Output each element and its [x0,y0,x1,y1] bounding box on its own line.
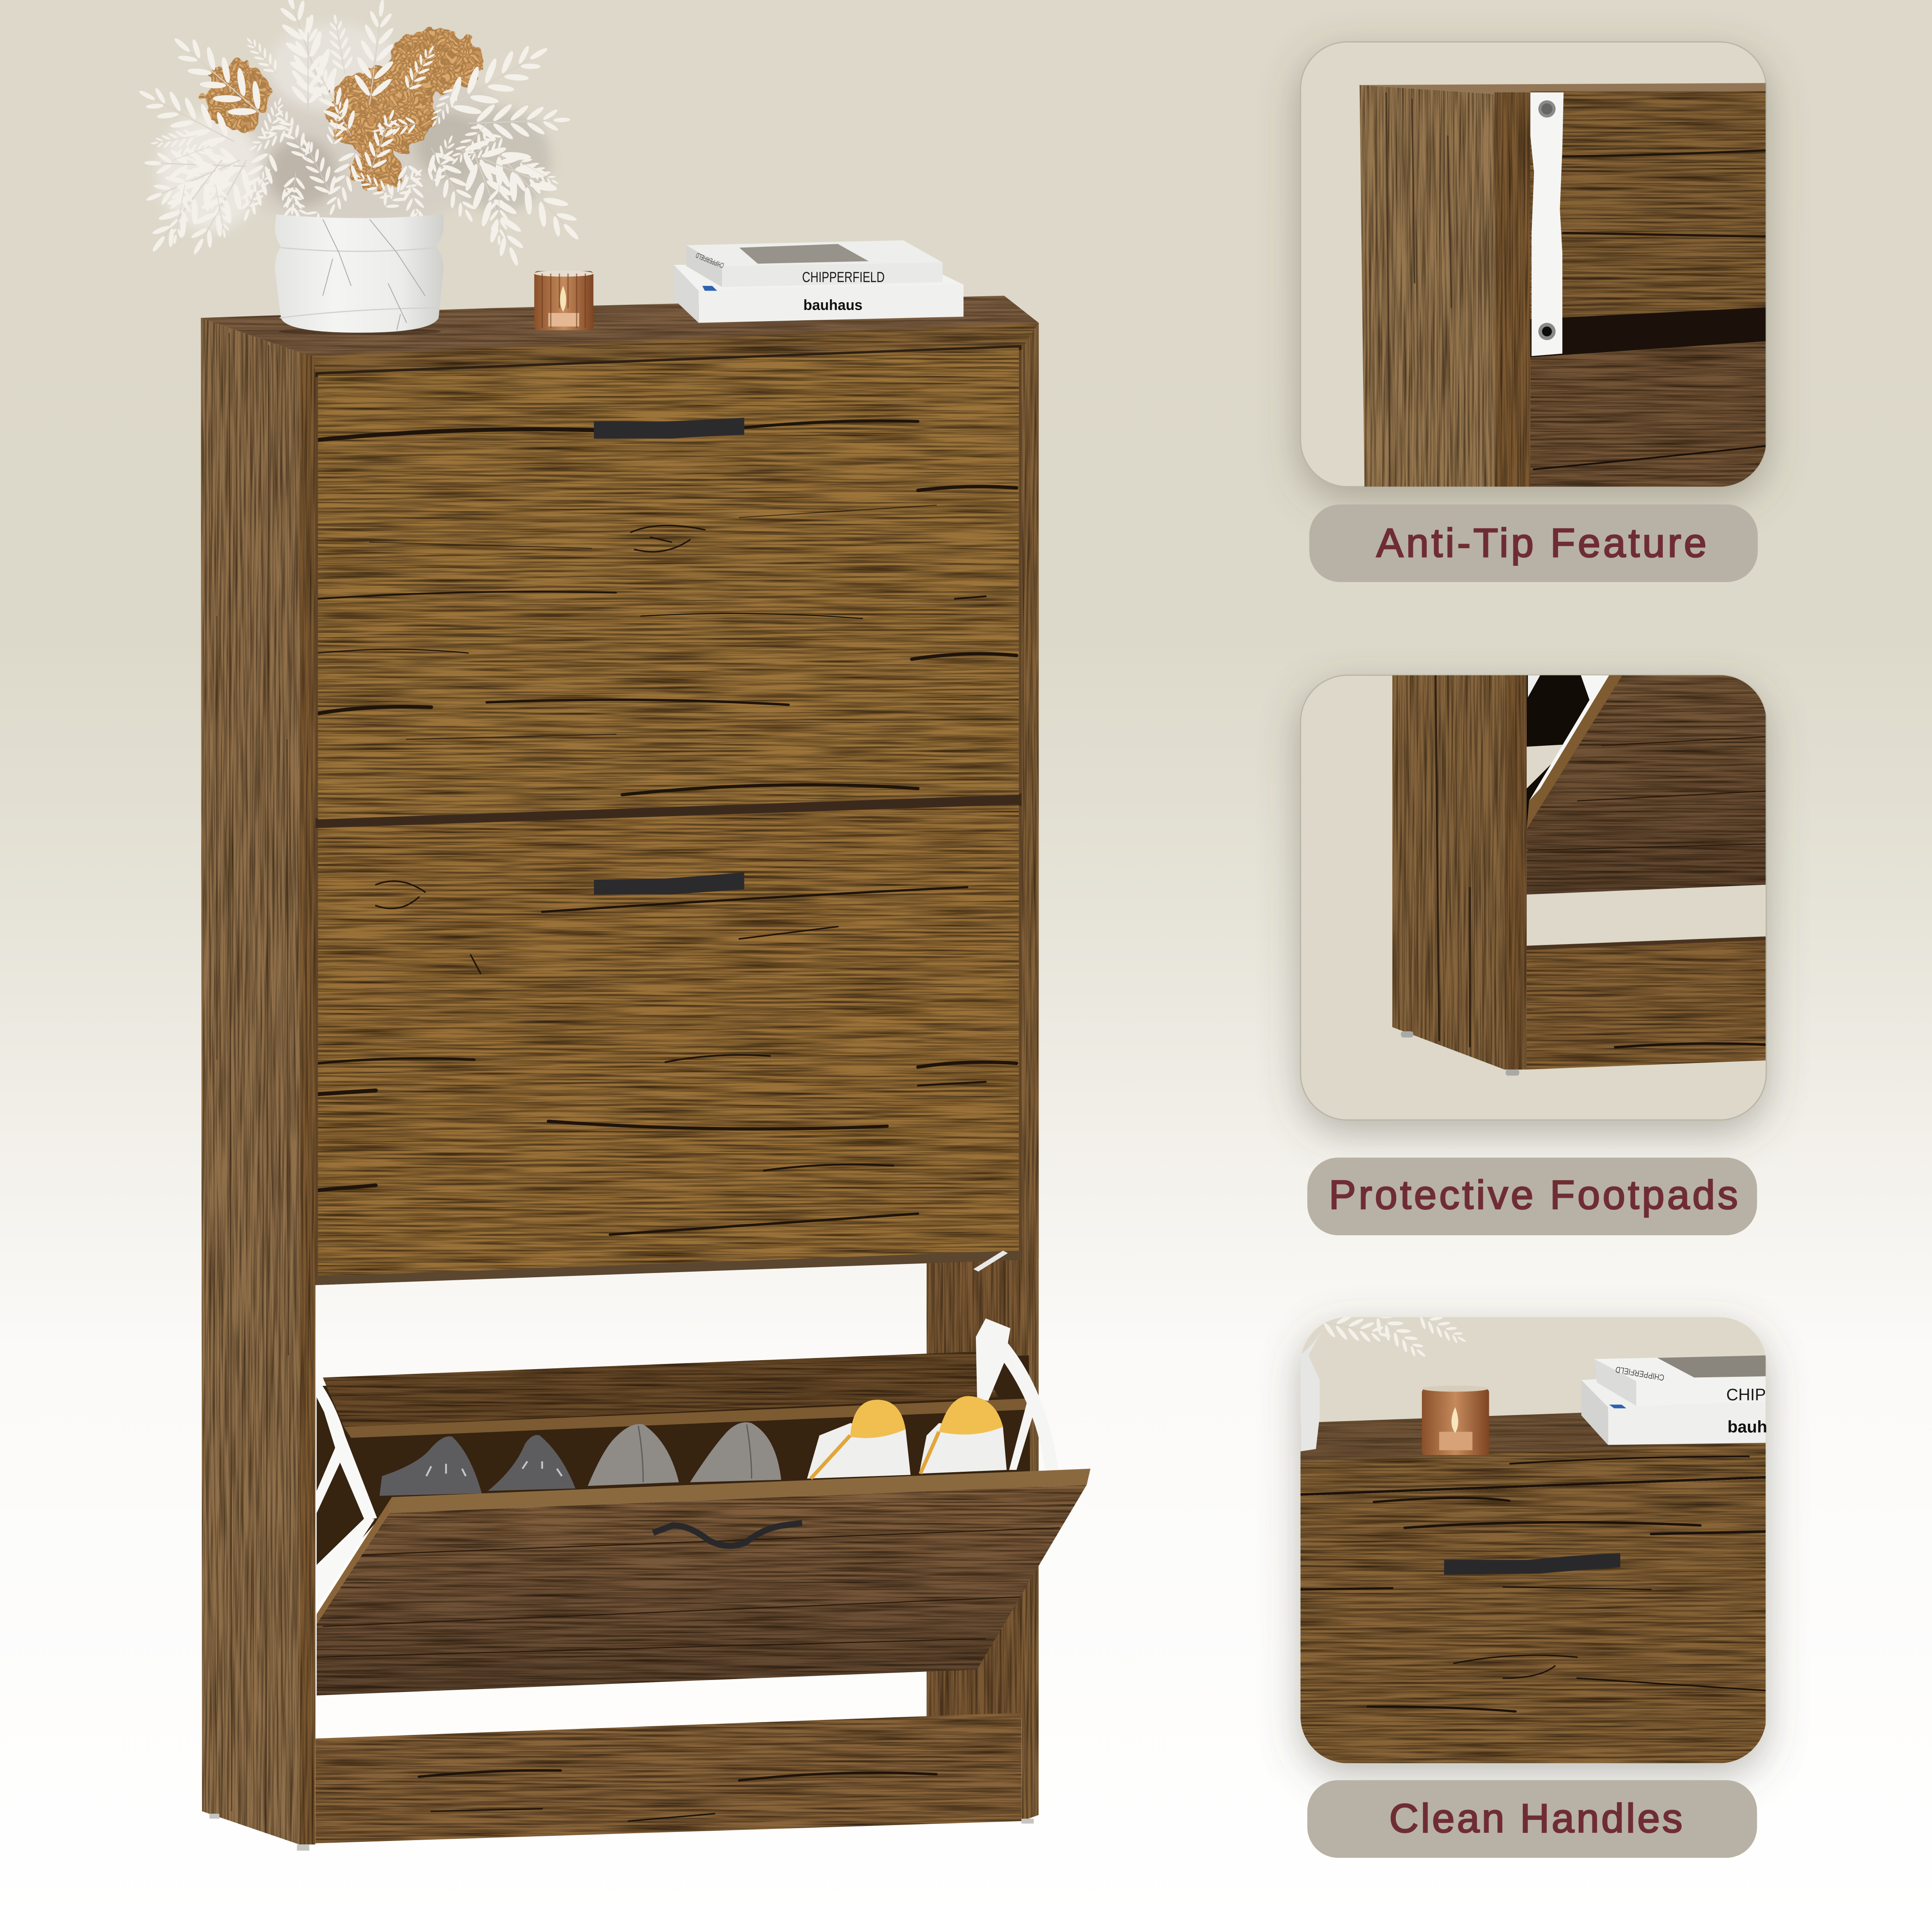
cabinet top surface [197,293,1041,357]
cabinet upper front backing [299,323,1039,1285]
hinge bracket below middle door [973,1251,1008,1272]
footpads [210,1814,1034,1851]
panel: clean handles [1300,1303,1777,1858]
book text: chipp: CHIPP [1726,1386,1777,1404]
book title: chipperfield: CHIPPERFIELD [802,269,885,286]
flap top lip [389,1469,1091,1513]
middle flip door [318,805,1020,1278]
door gap dark top [316,345,1021,377]
door bottom edge [316,1251,1021,1285]
book title: bauhaus: bauhaus [803,297,863,313]
bouquet of dried flowers [130,0,596,274]
product: shoe cabinet with decor [130,0,1091,1851]
label: protective footpads: Protective Footpads [1329,1172,1738,1218]
flap handle [653,1523,802,1546]
front ledge [344,1398,1030,1438]
footpad close-up [1392,675,1766,1075]
middle door handle [594,872,744,895]
book spine title: CHIPPERFIELD [695,251,725,270]
photo card 3 [1300,1317,1766,1763]
back wall of open compartment [927,1255,1023,1719]
door gap between top and middle doors [316,793,1021,828]
shoe pair: dark grey heels [380,1435,575,1496]
top flip door [318,347,1020,820]
compartment interior [317,1355,1030,1589]
rear board [320,1349,1000,1429]
shoe pair: white sneakers with yellow heels [807,1396,1007,1479]
anti-tip strap [1530,92,1564,356]
cabinet front edge right [1021,323,1039,1821]
anti-tip close-up [1359,83,1766,487]
shoe pair: grey flats [588,1422,781,1486]
left white support arm [317,1378,377,1608]
stacked books [674,240,963,323]
label pill 1 [1309,504,1758,582]
cabinet side panel [197,314,303,1848]
photo card 2 [1300,675,1766,1120]
candle [1422,1385,1489,1455]
flap left end [317,1497,392,1624]
label pill 2 [1307,1157,1757,1235]
tilted flap front [317,1485,1088,1697]
plinth [316,1713,1023,1846]
front top rail [313,323,1040,377]
footpads [1401,1031,1519,1075]
cabinet front edge left [299,352,317,1846]
label pill 3 [1307,1780,1757,1858]
book spine text: CHIPPERFIELD [1615,1364,1665,1382]
books [1581,1355,1777,1445]
open tilt-out compartment [317,1318,1091,1697]
label: anti-tip feature: Anti-Tip Feature [1376,520,1707,566]
handle [1444,1553,1620,1575]
candle holder [534,270,593,330]
book text: bauh: bauh [1728,1418,1767,1436]
leaves and vase fragment [1300,1303,1471,1452]
handle close-up [1300,1303,1777,1763]
panel: anti-tip feature [1300,42,1766,582]
label: clean handles: Clean Handles [1389,1796,1683,1841]
top door handle [594,418,744,439]
right white support arm [976,1318,1058,1470]
photo card 1 [1300,42,1766,487]
panel: protective footpads [1300,675,1766,1235]
marble vase [275,214,444,335]
